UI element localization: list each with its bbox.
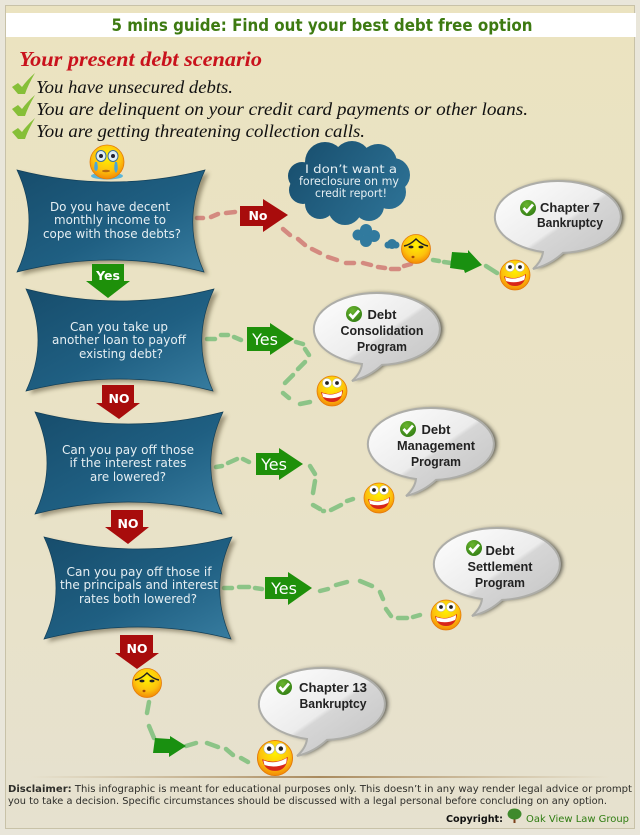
outcome: debt settlement: Program [475, 575, 525, 590]
arrow: small green bottom [153, 736, 186, 757]
emoji: happy 3 [364, 483, 394, 513]
question 2 [26, 289, 218, 394]
copyright: Copyright: [446, 814, 503, 825]
arrow: yes 1 [247, 323, 294, 355]
outcome: debt consolidation: Consolidation [340, 323, 424, 338]
question 2: existing debt? [79, 347, 163, 361]
arrow: no down 3: NO [126, 641, 148, 656]
outcome: chapter 7: Chapter 7 [540, 200, 600, 215]
question 4: rates both lowered? [79, 592, 197, 606]
arrow: no down 1: NO [108, 391, 130, 406]
arrow: yes down: Yes [95, 268, 120, 283]
question 4: the principals and interest [60, 578, 218, 592]
item 1: You have unsecured debts. [36, 77, 233, 97]
question 2: another loan to payoff [52, 333, 187, 347]
outcome: debt management [368, 408, 497, 496]
outcome: debt settlement: Settlement [468, 559, 533, 574]
outcome: chapter 7 [495, 181, 624, 269]
outcome: debt settlement [434, 528, 563, 616]
thought cloud: foreclosure on my [299, 175, 399, 188]
outcome: debt consolidation: Debt [368, 307, 397, 322]
item 3: You are getting threatening collection calls. [36, 121, 365, 141]
arrow: yes 1: Yes [251, 330, 278, 349]
thought cloud: credit report! [315, 187, 387, 200]
question 1: monthly income to [54, 213, 166, 227]
icon: check 3 [12, 118, 35, 139]
outcome: chapter 7: Bankruptcy [537, 215, 604, 230]
arrow: no down 1 [96, 385, 140, 419]
question 4 [44, 537, 236, 642]
arrow: no down 2: NO [117, 516, 139, 531]
dashed connectors: green [147, 260, 497, 762]
arrow: small green top [450, 250, 482, 273]
question 3: if the interest rates [70, 456, 186, 470]
outcome: debt settlement: Debt [486, 543, 515, 558]
outcome: debt management: Program [411, 454, 461, 469]
emoji: happy 2 [317, 376, 347, 406]
icon: check 2 [12, 95, 35, 116]
icon: check 1 [12, 73, 35, 94]
arrow: no down 3 [115, 635, 159, 669]
outcome: debt management: Debt [422, 422, 451, 437]
question 4: Can you pay off those if [66, 565, 212, 579]
arrow: no (to thought) [240, 199, 288, 232]
emoji: happy 1 [500, 260, 530, 290]
icon: tree [508, 808, 522, 823]
thought puffs [352, 224, 400, 249]
arrow: yes 2 [256, 448, 303, 480]
arrow: yes down [86, 264, 130, 298]
disclaimer: you to take a decision. Specific circumstances should be discussed with a legal personal before concluding on any option. [8, 796, 607, 807]
outcome: chapter 13: Bankruptcy [300, 696, 367, 711]
outcome: chapter 13 [259, 668, 388, 756]
question 2: Can you take up [70, 320, 168, 334]
emoji: happy 4 [431, 600, 461, 630]
disclaimer [8, 784, 632, 807]
outcome: chapter 13: Chapter 13 [299, 680, 367, 695]
checklist [12, 73, 528, 141]
emoji: happy 5 [257, 740, 293, 776]
emoji: worried 2 [132, 668, 162, 698]
emoji: crying [90, 145, 124, 180]
question 1: cope with those debts? [43, 227, 181, 241]
copyright [446, 808, 629, 825]
thought cloud: I don’t want a [305, 163, 397, 176]
outcome: debt consolidation: Program [357, 339, 407, 354]
question 1: Do you have decent [50, 200, 170, 214]
emoji: worried 1 [402, 234, 430, 264]
outcome: debt consolidation [314, 293, 443, 381]
question 3: are lowered? [90, 470, 166, 484]
arrow: no down 2 [105, 510, 149, 544]
disclaimer: Disclaimer: This infographic is meant for educational purposes only. This doesn’t in any way render legal advice or prompt [8, 784, 632, 795]
outcome: debt management: Management [397, 438, 476, 453]
item 2: You are delinquent on your credit card payments or other loans. [36, 99, 528, 119]
dashed connectors: red [197, 212, 411, 269]
question 3 [35, 412, 227, 517]
question 3: Can you pay off those [62, 443, 194, 457]
company name: Oak View Law Group [526, 814, 629, 825]
arrow: yes 3 [265, 572, 312, 605]
arrow: no (to thought): No [248, 208, 268, 223]
heading: present debt scenario: Your present debt scenario [19, 47, 262, 71]
title: 5 mins guide: Find out your best debt free option [112, 16, 532, 36]
thought cloud [288, 141, 410, 249]
arrow: yes 2: Yes [260, 455, 287, 474]
arrow: yes 3: Yes [270, 579, 297, 598]
title [6, 13, 636, 37]
question 1 [17, 170, 209, 275]
